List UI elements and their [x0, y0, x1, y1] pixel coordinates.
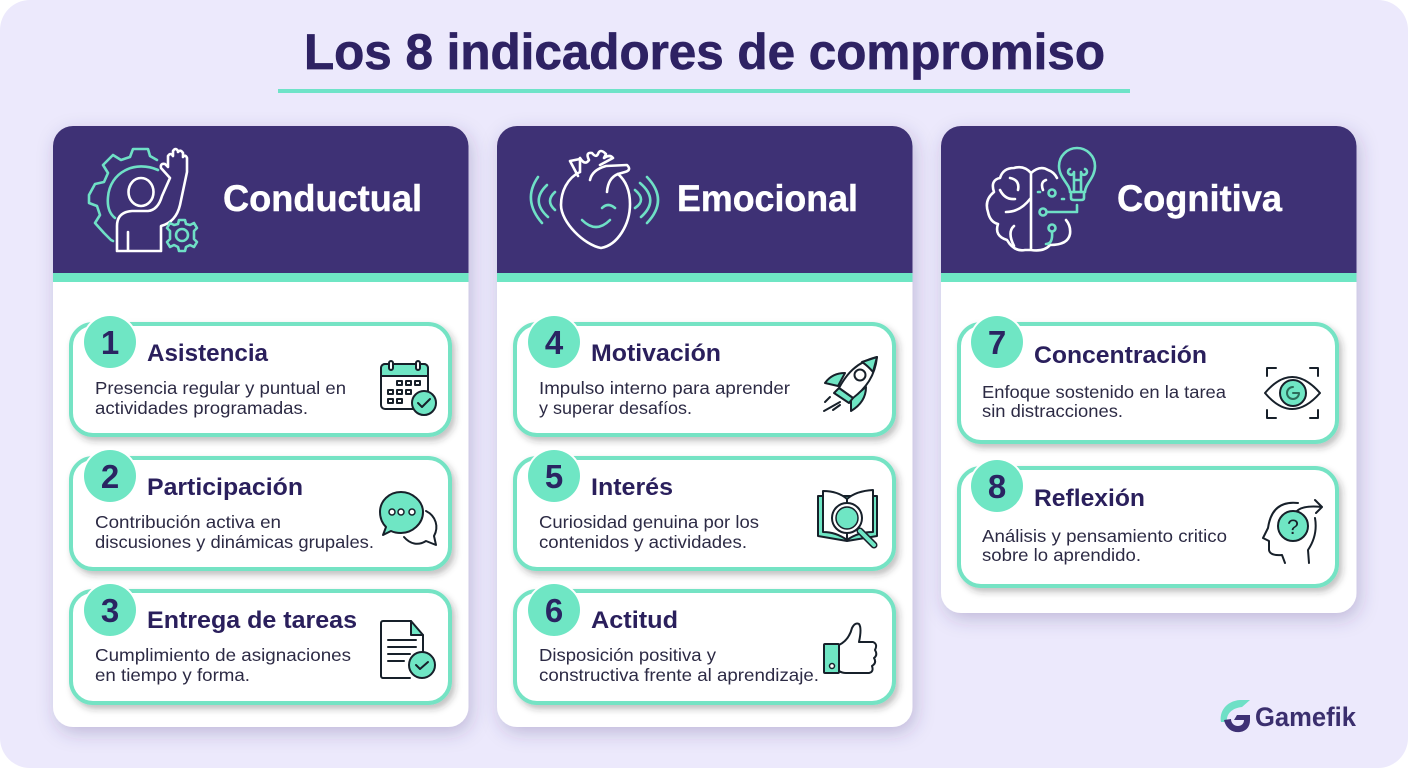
description 3: en tiempo y forma. [95, 665, 250, 685]
card 2: participacion [71, 448, 450, 569]
badge 2 [82, 448, 138, 504]
description 2: Contribución activa en [95, 512, 281, 532]
description 2: discusiones y dinámicas grupales. [95, 532, 374, 552]
icon: eye in focus frame [1265, 368, 1320, 418]
heading 4: Motivación [591, 340, 721, 367]
badge 1 [82, 314, 138, 370]
badge 7: 7 [988, 324, 1006, 361]
panel: emocional [497, 126, 912, 727]
heading 7: Concentración [1034, 342, 1207, 369]
description 1 [95, 378, 346, 418]
description 1: actividades programadas. [95, 398, 308, 418]
icon: person with gears [89, 149, 197, 251]
card 6: actitud [515, 582, 894, 703]
description 8 [982, 526, 1227, 565]
description 4 [539, 378, 790, 418]
card 5: interes [515, 448, 894, 569]
icon: rocket [824, 357, 877, 411]
description 1: Presencia regular y puntual en [95, 378, 346, 398]
icon: heart with sound waves [531, 151, 658, 248]
icon: document with check [381, 621, 435, 678]
header: cognitiva [941, 126, 1356, 282]
heading 1: Asistencia [147, 340, 269, 367]
logo: gamefik [1221, 700, 1357, 732]
card 8: reflexion [959, 458, 1337, 586]
logo wordmark: Gamefik [1255, 702, 1357, 732]
description 8: Análisis y pensamiento critico [982, 526, 1227, 546]
icon: brain with light bulb [987, 148, 1095, 250]
badge 3: 3 [101, 592, 119, 629]
description 3 [95, 645, 351, 685]
badge 1: 1 [101, 324, 119, 361]
card 4: motivacion [515, 314, 894, 435]
panel: conductual [53, 126, 468, 727]
heading: emocional: Emocional [677, 178, 858, 219]
title: Los 8 indicadores de compromiso [304, 24, 1105, 80]
description 3: Cumplimiento de asignaciones [95, 645, 351, 665]
badge 6: 6 [545, 592, 563, 629]
description 6: constructiva frente al aprendizaje. [539, 665, 819, 685]
badge 4: 4 [545, 324, 564, 361]
badge 6 [526, 582, 582, 638]
heading 5: Interés [591, 474, 673, 501]
icon: chat bubbles [380, 492, 436, 545]
heading 8: Reflexión [1034, 485, 1145, 512]
header: conductual [53, 126, 468, 282]
icon: thumbs up [824, 624, 876, 673]
header: emocional [497, 126, 912, 282]
badge 3 [82, 582, 138, 638]
description 5 [539, 512, 759, 552]
badge 2: 2 [101, 458, 119, 495]
badge 5: 5 [545, 458, 563, 495]
description 2 [95, 512, 374, 552]
description 7 [982, 382, 1226, 421]
heading: conductual: Conductual [223, 178, 422, 219]
description 6 [539, 645, 819, 685]
icon: head with question mark [1263, 500, 1322, 563]
logo mark [1221, 700, 1250, 732]
badge 5 [526, 448, 582, 504]
badge 4 [526, 314, 582, 370]
description 5: contenidos y actividades. [539, 532, 747, 552]
icon: head with question mark: ? [1287, 516, 1299, 539]
description 8: sobre lo aprendido. [982, 545, 1141, 565]
badge 8 [969, 458, 1025, 514]
description 7: Enfoque sostenido en la tarea [982, 382, 1226, 402]
icon: book with magnifier [818, 490, 877, 545]
description 7: sin distracciones. [982, 401, 1123, 421]
badge 7 [969, 314, 1025, 370]
icon: calendar [381, 361, 436, 415]
card 7: concentracion [959, 314, 1337, 442]
heading 3: Entrega de tareas [147, 607, 357, 634]
description 4: y superar desafíos. [539, 398, 692, 418]
card 3: entrega de tareas [71, 582, 450, 703]
description 6: Disposición positiva y [539, 645, 716, 665]
description 5: Curiosidad genuina por los [539, 512, 759, 532]
card 1: asistencia [71, 314, 450, 435]
heading 6: Actitud [591, 607, 678, 634]
heading: cognitiva: Cognitiva [1117, 178, 1282, 219]
description 4: Impulso interno para aprender [539, 378, 790, 398]
heading 2: Participación [147, 474, 303, 501]
panel: cognitiva [941, 126, 1356, 613]
badge 8: 8 [988, 468, 1006, 505]
